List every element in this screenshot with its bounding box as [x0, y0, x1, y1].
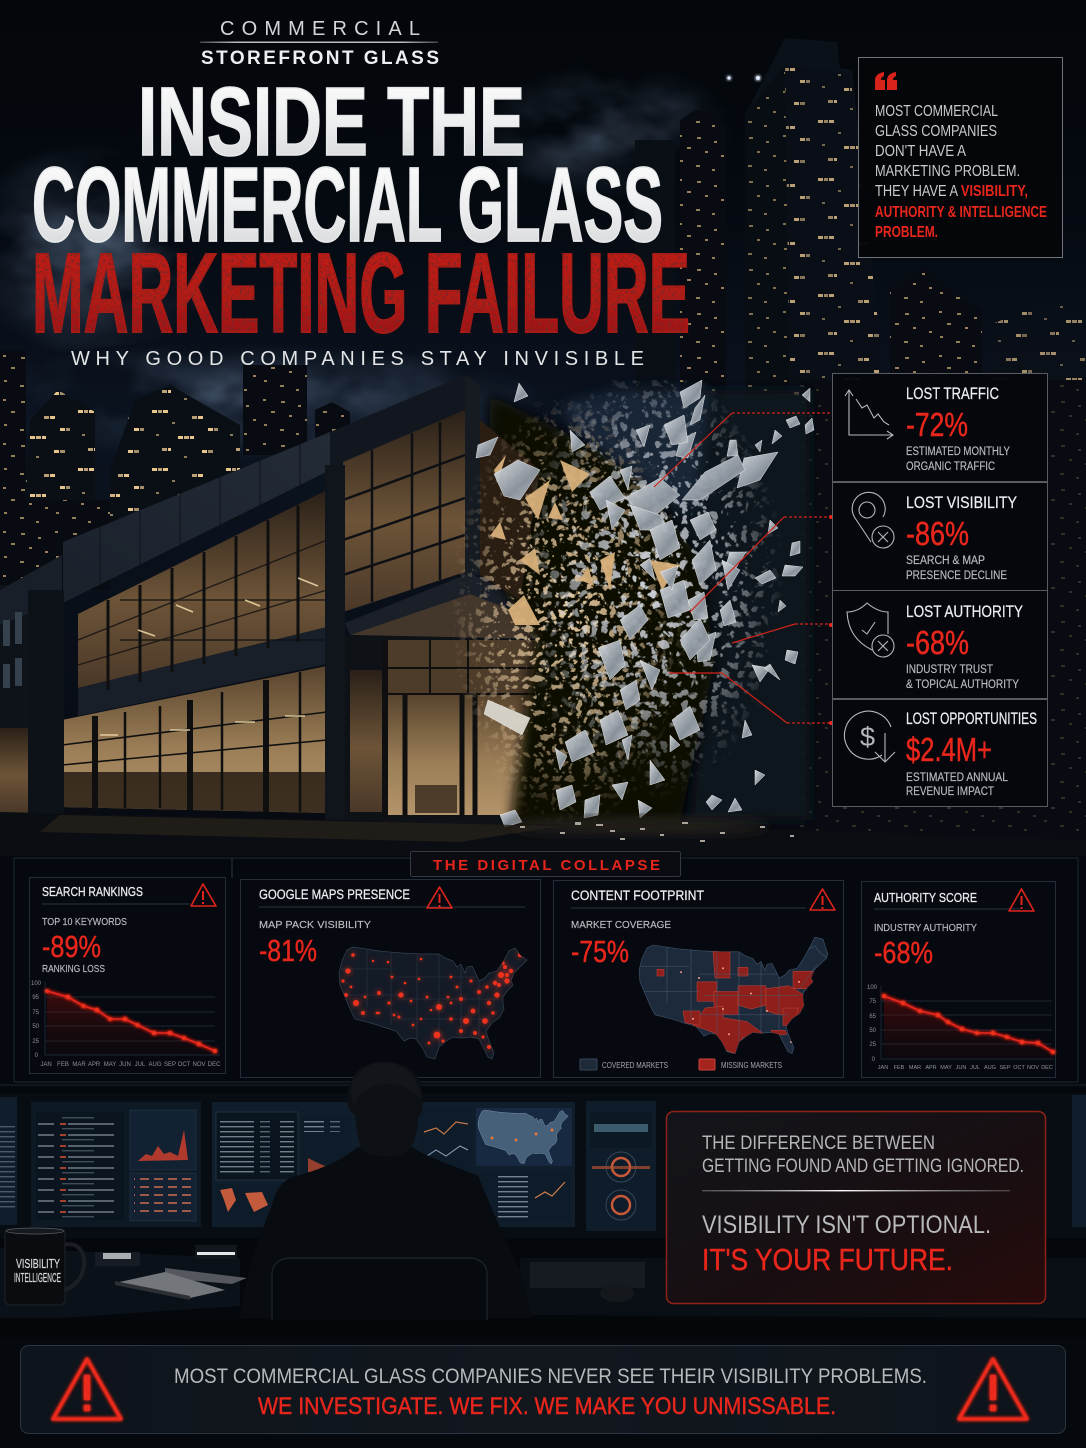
stat panel: lost authority: -68%: [906, 624, 969, 661]
section heading badge: THE DIGITAL COLLAPSE: [433, 857, 660, 874]
line chart: authority: [867, 985, 1055, 1071]
exploding glass and shards: [450, 380, 814, 830]
panel: google maps presence: MAP PACK VISIBILITY: [259, 919, 371, 931]
legend: [580, 1059, 782, 1070]
line chart: ranking loss: SEP: [164, 1062, 176, 1068]
line chart: authority: NOV: [1027, 1065, 1039, 1071]
line chart: authority: FEB: [894, 1065, 905, 1071]
map: covered and missing markets: [639, 937, 828, 1054]
panel: content footprint: MARKET COVERAGE: [571, 919, 671, 931]
stat panel: lost visibility: [832, 482, 1048, 590]
panel: google maps presence: GOOGLE MAPS PRESENCE: [259, 887, 410, 902]
line chart: ranking loss: NOV: [192, 1062, 206, 1068]
panel: search rankings: -89%: [42, 929, 101, 964]
line chart: ranking loss: 100: [31, 981, 42, 987]
line chart: ranking loss: 95: [32, 995, 40, 1001]
stat panel: lost opportunities: [832, 700, 1048, 806]
panel: authority score: INDUSTRY AUTHORITY: [874, 922, 977, 934]
line chart: ranking loss: 50: [32, 1024, 40, 1030]
quote box: THEY HAVE A VISIBILITY,: [875, 183, 1028, 200]
stat panel: lost authority: LOST AUTHORITY: [906, 602, 1023, 621]
panel: google maps presence: [240, 880, 540, 1078]
panel: search rankings: SEARCH RANKINGS: [42, 884, 143, 899]
skyline: right towers: [635, 38, 1086, 850]
line chart: ranking loss: APR: [88, 1062, 101, 1068]
line chart: ranking loss: JUL: [135, 1062, 146, 1068]
bottom banner: MOST COMMERCIAL GLASS COMPANIES NEVER SEE THEIR VISIBILITY PROBLEMS.: [174, 1364, 927, 1388]
icon: warning: [427, 887, 452, 908]
quote mark: [875, 72, 897, 90]
line chart: authority: 50: [869, 1028, 877, 1034]
top brand: Commercial Storefront Glass: COMMERCIAL: [220, 18, 420, 40]
line chart: ranking loss: MAR: [72, 1062, 86, 1068]
panel: search rankings: TOP 10 KEYWORDS: [42, 916, 127, 928]
top brand: Commercial Storefront Glass: STOREFRONT GLASS: [201, 48, 439, 69]
quote box: GLASS COMPANIES: [875, 123, 997, 140]
sidewalk and debris: [0, 812, 1086, 858]
storefront building: [0, 375, 596, 825]
digital collapse dashboard frame: [0, 856, 1086, 1088]
monitor: reports and revenue chart: [31, 1102, 201, 1227]
callout: visibility isn't optional: VISIBILITY ISN'T OPTIONAL.: [702, 1211, 991, 1239]
icon: warning: [810, 889, 835, 910]
monitor: data tables and maps: [212, 1102, 575, 1227]
quote box: PROBLEM.: [875, 224, 938, 241]
person from behind: [240, 1062, 530, 1320]
icon: map pin with cross: [852, 492, 894, 548]
stat panel: lost authority: & TOPICAL AUTHORITY: [906, 679, 1019, 691]
line chart: authority: 25: [869, 1042, 877, 1048]
stat panel: lost traffic: -72%: [906, 406, 968, 443]
connector lines to stats: [654, 413, 833, 725]
title: [32, 67, 690, 356]
line chart: ranking loss: AUG: [148, 1062, 162, 1068]
coffee mug: INTELLIGENCE: [14, 1270, 61, 1285]
stat panel: lost visibility: -86%: [906, 515, 969, 552]
icon: dollar with down arrow: [844, 711, 895, 762]
line chart: authority: JUL: [970, 1065, 980, 1071]
line chart: ranking loss: JAN: [40, 1062, 52, 1068]
line chart: authority: 0: [872, 1057, 876, 1063]
icon: warning left: [53, 1359, 121, 1419]
callout: visibility isn't optional: [666, 1112, 1046, 1304]
desk: [0, 1245, 1086, 1342]
stat panel: lost visibility: SEARCH & MAP: [906, 555, 985, 567]
panel: authority score: [862, 882, 1056, 1078]
icon: warning right: [959, 1359, 1027, 1419]
quote box: MARKETING PROBLEM.: [875, 163, 1020, 180]
chair: [272, 1258, 487, 1320]
line chart: ranking loss: DEC: [208, 1062, 221, 1068]
callout: visibility isn't optional: GETTING FOUND AND GETTING IGNORED.: [702, 1156, 1024, 1177]
icon: warning: [1009, 889, 1034, 911]
title: INSIDE THE: [138, 67, 525, 176]
background: [0, 74, 1086, 719]
stat panel: lost opportunities: $2.4M+: [906, 731, 992, 768]
line chart: ranking loss: 25: [32, 1039, 40, 1045]
panel: authority score: AUTHORITY SCORE: [874, 890, 977, 905]
monitor: radar dials: [586, 1101, 656, 1231]
line chart: authority: OCT: [1013, 1065, 1025, 1071]
subtitle: WHY GOOD COMPANIES STAY INVISIBLE: [71, 348, 644, 370]
line chart: authority: DEC: [1041, 1065, 1053, 1071]
icon: dollar with down arrow: $: [860, 722, 875, 752]
icon: shield with cross: [847, 603, 894, 657]
stat panel: lost traffic: LOST TRAFFIC: [906, 384, 999, 403]
line chart: authority: MAR: [909, 1065, 921, 1071]
section heading badge: [410, 852, 680, 876]
icon: falling chart: [845, 390, 893, 439]
line chart: authority: AUG: [984, 1065, 996, 1071]
line chart: authority: 65: [869, 1014, 877, 1020]
line chart: authority: MAY: [940, 1065, 952, 1071]
quote box: MOST COMMERCIAL: [875, 103, 998, 120]
panel: search rankings: RANKING LOSS: [42, 963, 105, 975]
quote box: DON'T HAVE A: [875, 143, 966, 160]
stat panel: lost opportunities: ESTIMATED ANNUAL: [906, 772, 1009, 784]
legend: MISSING MARKETS: [721, 1060, 782, 1070]
quote box: [858, 58, 1062, 258]
line chart: ranking loss: 75: [32, 1010, 40, 1016]
panel: search rankings: [30, 878, 226, 1074]
line chart: authority: SEP: [999, 1065, 1011, 1071]
panel: content footprint: -75%: [571, 934, 629, 969]
bottom banner: WE INVESTIGATE. WE FIX. WE MAKE YOU UNMISSABLE.: [258, 1393, 836, 1420]
stat panel: lost traffic: ESTIMATED MONTHLY: [906, 446, 1010, 458]
panel: content footprint: CONTENT FOOTPRINT: [571, 888, 704, 903]
panel: google maps presence: -81%: [259, 933, 317, 968]
line chart: authority: 100: [867, 985, 878, 991]
line chart: authority: APR: [925, 1065, 937, 1071]
stat panel: lost visibility: PRESENCE DECLINE: [906, 570, 1007, 582]
stat panel: lost visibility: LOST VISIBILITY: [906, 493, 1017, 512]
callout: visibility isn't optional: IT'S YOUR FUTURE.: [702, 1242, 953, 1277]
line chart: ranking loss: OCT: [178, 1062, 191, 1068]
skyline: left towers: [0, 350, 350, 590]
line chart: ranking loss: FEB: [57, 1062, 69, 1068]
line chart: authority: JAN: [878, 1065, 888, 1071]
line chart: authority: 75: [869, 999, 877, 1005]
panel: authority score: -68%: [874, 935, 933, 970]
stat panel: lost traffic: ORGANIC TRAFFIC: [906, 461, 995, 473]
coffee mug: VISIBILITY: [16, 1256, 60, 1271]
line chart: authority: JUN: [956, 1065, 966, 1071]
bottom banner: [0, 1338, 1086, 1448]
panel: content footprint: [554, 880, 844, 1078]
line chart: ranking loss: 0: [35, 1053, 39, 1059]
callout: visibility isn't optional: THE DIFFERENCE BETWEEN: [702, 1133, 935, 1154]
stat panel: lost authority: [832, 590, 1048, 698]
top brand: Commercial Storefront Glass: [200, 18, 439, 69]
map: red hotspots across the US: [339, 947, 527, 1059]
monitor wall: [0, 1088, 1086, 1338]
stat panel: lost opportunities: REVENUE IMPACT: [906, 786, 994, 798]
stat panel: lost traffic: [832, 374, 1048, 482]
legend: COVERED MARKETS: [602, 1060, 668, 1070]
coffee mug: [5, 1228, 84, 1305]
stat panel: lost authority: INDUSTRY TRUST: [906, 664, 993, 676]
line chart: ranking loss: [31, 981, 221, 1068]
desk papers: [115, 1268, 247, 1300]
line chart: ranking loss: MAY: [104, 1062, 116, 1068]
icon: warning: [191, 884, 216, 906]
line chart: ranking loss: JUN: [119, 1062, 131, 1068]
